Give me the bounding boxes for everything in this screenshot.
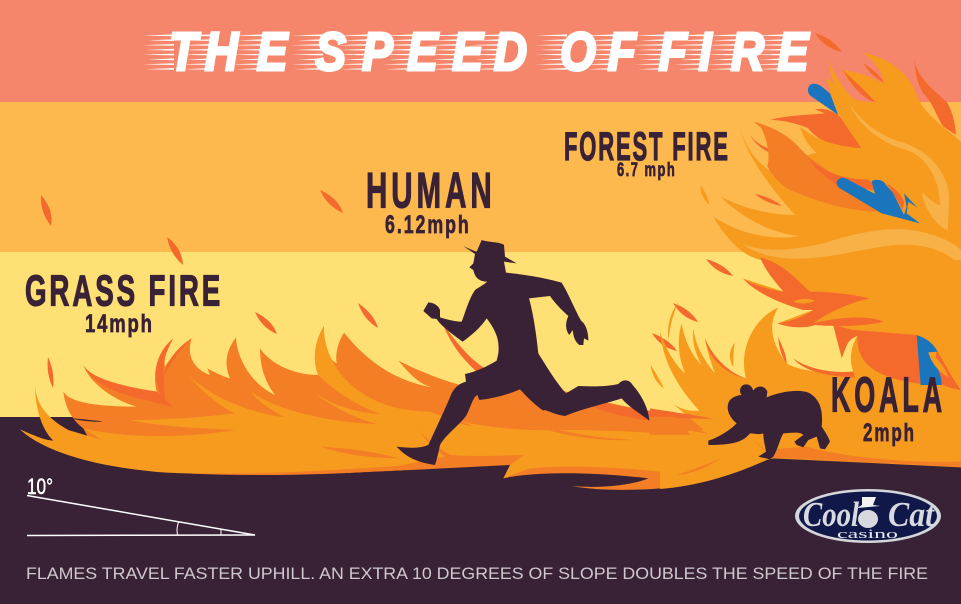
grass fire: front flames xyxy=(20,326,660,493)
logo: Cool Cat casino: Cat xyxy=(888,495,935,534)
fire detail and ground edge under runner xyxy=(330,322,660,500)
ground xyxy=(0,417,961,604)
red flame sweep xyxy=(743,257,883,327)
label: human: 6.12mph xyxy=(385,210,469,239)
label: human: HUMAN xyxy=(366,162,492,218)
label: grass fire: 14mph xyxy=(85,309,152,338)
icon: blue flame bottom xyxy=(917,335,942,385)
icon: cat with hat xyxy=(857,497,880,508)
background band: salmon xyxy=(0,0,961,103)
label: forest fire: FOREST FIRE xyxy=(564,124,728,169)
koala silhouette xyxy=(708,384,830,459)
koala flames xyxy=(650,257,961,487)
background band: yellow xyxy=(0,252,961,417)
label: grass fire xyxy=(25,266,220,338)
runner silhouette xyxy=(397,240,649,465)
background band: amber xyxy=(0,102,961,252)
logo: Cool Cat casino: Cool xyxy=(803,495,859,534)
grass fire: back flames xyxy=(20,326,707,493)
big fire: dark orange flame xyxy=(753,122,880,212)
logo: Cool Cat casino xyxy=(795,489,941,543)
ground mask xyxy=(330,465,660,500)
big fire: pale highlight bands xyxy=(848,102,949,231)
big fire: upper flame xyxy=(800,53,961,237)
caption: FLAMES TRAVEL FASTER UPHILL. AN EXTRA 10 DEGREES OF SLOPE DOUBLES THE SPEED OF THE FIRE xyxy=(26,564,928,583)
icon: blue flame middle xyxy=(837,178,920,223)
big fire: back red flames xyxy=(701,53,961,277)
leaves: drifting embers xyxy=(41,33,842,388)
grass fire: base sweep toward koala xyxy=(600,420,800,489)
label: koala: KOALA xyxy=(831,368,942,423)
grass fire: red flame edges xyxy=(83,338,680,422)
flame licks xyxy=(705,338,746,378)
big fire: lower main body xyxy=(713,125,961,277)
slope diagram xyxy=(27,474,255,536)
label: koala: 2mph xyxy=(863,419,914,447)
label: forest fire: 6.7 mph xyxy=(617,160,675,181)
logo: Cool Cat casino: casino xyxy=(837,526,898,541)
title: THE SPEED OF FIRE xyxy=(169,22,810,82)
label: grass fire: GRASS FIRE xyxy=(25,266,220,315)
slope diagram: 10° xyxy=(27,474,53,499)
label: koala xyxy=(831,368,942,447)
icon: blue flame top xyxy=(808,84,838,115)
